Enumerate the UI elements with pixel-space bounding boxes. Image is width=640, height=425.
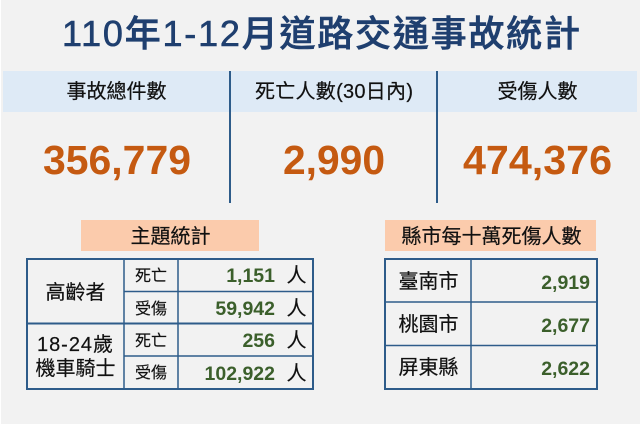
row: seniors injuries: 受傷 bbox=[135, 300, 167, 318]
heading: topic statistics bbox=[81, 220, 259, 251]
row: riders deaths: 256 bbox=[242, 330, 275, 352]
row: riders injuries: 人 bbox=[286, 362, 306, 385]
heading: county casualties bbox=[385, 220, 596, 251]
heading: county casualties: 縣市每十萬死傷人數 bbox=[402, 225, 582, 248]
title: 110年1-12月道路交通事故統計 bbox=[62, 13, 580, 54]
row: riders injuries bbox=[135, 362, 306, 385]
row: Taoyuan: 2,677 bbox=[541, 315, 590, 337]
column divider bbox=[229, 71, 231, 203]
row: seniors injuries bbox=[135, 297, 306, 320]
row: Taoyuan bbox=[398, 313, 590, 337]
column divider bbox=[436, 71, 438, 203]
row label: young riders bbox=[36, 333, 116, 380]
row label: young riders: 機車騎士 bbox=[36, 357, 116, 380]
row label: seniors: 高齡者 bbox=[46, 281, 106, 304]
row: riders deaths bbox=[135, 329, 306, 352]
table: topic statistics bbox=[27, 259, 313, 389]
panel: key figures bbox=[3, 71, 637, 203]
row: Tainan: 臺南市 bbox=[398, 270, 458, 293]
heading: total accidents: 事故總件數 bbox=[66, 80, 166, 103]
number: injuries: 474,376 bbox=[463, 137, 612, 183]
row: seniors injuries: 59,942 bbox=[215, 298, 275, 320]
row: Taoyuan: 桃園市 bbox=[398, 313, 458, 336]
row: seniors deaths: 人 bbox=[286, 264, 306, 287]
heading: injuries: 受傷人數 bbox=[498, 80, 578, 103]
heading: topic statistics: 主題統計 bbox=[130, 225, 210, 248]
heading: deaths: 死亡人數(30日內) bbox=[255, 80, 413, 103]
header band bbox=[3, 71, 637, 112]
table: county casualties bbox=[385, 259, 597, 389]
row: riders injuries: 102,922 bbox=[204, 363, 275, 385]
number: total accidents: 356,779 bbox=[43, 137, 191, 183]
row: seniors deaths: 1,151 bbox=[226, 265, 275, 287]
row: seniors deaths: 死亡 bbox=[135, 267, 167, 285]
number: deaths: 2,990 bbox=[283, 137, 385, 183]
row: riders injuries: 受傷 bbox=[135, 364, 167, 382]
row label: young riders: 18-24歲 bbox=[37, 333, 113, 356]
row: seniors injuries: 人 bbox=[286, 297, 306, 320]
row: Pingtung: 屏東縣 bbox=[398, 356, 458, 379]
row: Tainan: 2,919 bbox=[541, 272, 590, 294]
row: Pingtung: 2,622 bbox=[541, 358, 590, 380]
panel: topic statistics bbox=[27, 220, 313, 389]
row: riders deaths: 死亡 bbox=[135, 332, 167, 350]
row: Tainan bbox=[398, 270, 590, 294]
panel: county casualties per 100k bbox=[385, 220, 597, 389]
row: riders deaths: 人 bbox=[286, 329, 306, 352]
row: Pingtung bbox=[398, 356, 590, 380]
row: seniors deaths bbox=[135, 264, 306, 287]
